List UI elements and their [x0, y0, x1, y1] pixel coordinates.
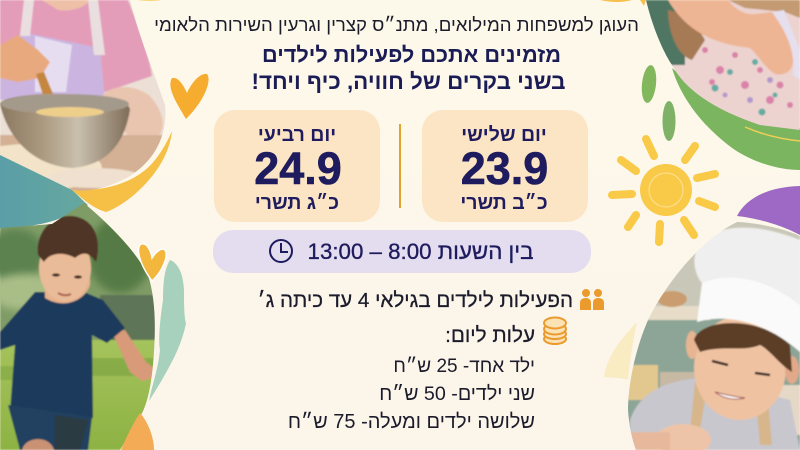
photo: girl in floral dress — [646, 0, 800, 130]
photo: child mixing dough in a bowl — [0, 0, 175, 195]
hours pill — [213, 230, 591, 273]
card: Wednesday: כ״ג תשרי — [255, 192, 339, 214]
text: daily cost heading: עלות ליום: — [445, 324, 535, 347]
photo: boy in a chef hat — [620, 220, 800, 450]
heading: invitation title: מזמינים אתכם לפעילות לילדים — [262, 42, 561, 67]
icon: two people — [580, 289, 604, 310]
card: Tuesday: כ״ב תשרי — [460, 192, 548, 214]
icon: orange heart — [170, 74, 209, 119]
prices list — [288, 356, 535, 433]
card: Wednesday — [214, 110, 380, 222]
icon: clock — [270, 240, 292, 262]
pale yellow brush left of chef photo — [604, 322, 637, 380]
card: Tuesday — [422, 110, 588, 222]
card: Tuesday: יום שלישי — [461, 124, 547, 146]
green brush stroke under girl photo — [672, 68, 800, 170]
icon: stack of coins — [544, 318, 566, 344]
orange shape bottom left — [121, 413, 154, 450]
card: Tuesday: 23.9 — [461, 143, 548, 194]
prices list: שני ילדים- 50 ש״ח — [379, 383, 535, 405]
purple shape top right of chef photo — [737, 186, 800, 235]
prices list: ילד אחד- 25 ש״ח — [393, 356, 535, 377]
heading: organisers line: העוגן למשפחות המילואים, מתנ״ס קצרין וגרעין השירות הלאומי — [154, 14, 639, 35]
heading: invitation title: בשני בקרים של חוויה, כיף ויחד! — [251, 69, 566, 94]
photo: boy running on the grass — [0, 200, 160, 450]
card: Wednesday: 24.9 — [254, 143, 342, 194]
heading: invitation title — [251, 42, 566, 94]
top yellow accents — [600, 0, 646, 6]
icon: green leaves — [640, 64, 676, 141]
divider between the days — [399, 124, 401, 208]
teal wave shape — [0, 155, 88, 228]
green feather brush — [149, 260, 186, 401]
icon: yellow outlined heart — [139, 244, 166, 281]
hours pill: בין השעות 8:00 – 13:00 — [308, 239, 533, 264]
prices list: שלושה ילדים ומעלה- 75 ש״ח — [288, 411, 535, 433]
text: age range: הפעילות לילדים בגילאי 4 עד כיתה ג׳ — [258, 289, 573, 312]
icon: sun — [612, 139, 715, 242]
yellow brush stroke under baking photo — [72, 131, 172, 212]
card: Wednesday: יום רביעי — [258, 124, 336, 146]
